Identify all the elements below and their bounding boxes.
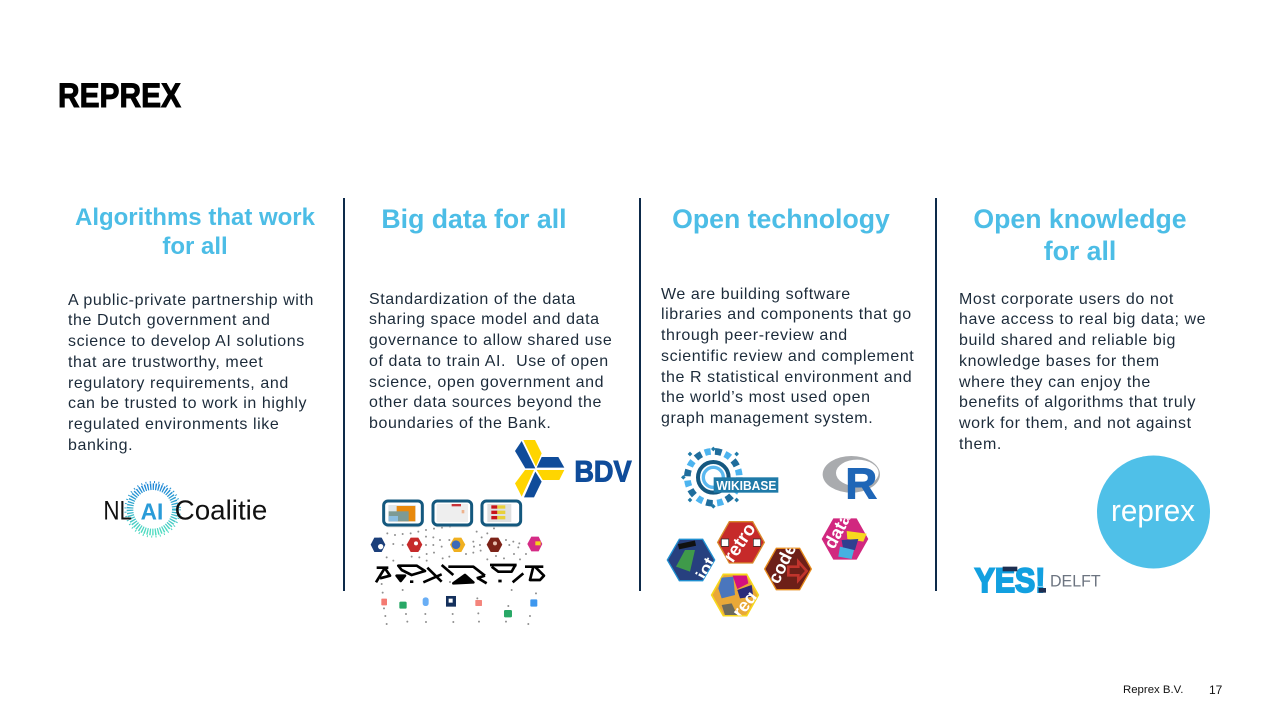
divider 3 <box>935 198 937 591</box>
text: algorithms description: the Dutch government and <box>68 312 270 329</box>
sticker: retro: retro <box>719 519 760 566</box>
logo: NL AI Coalitie: Coalitie <box>175 494 267 525</box>
connector dots <box>380 525 536 624</box>
hex stickers <box>666 518 868 616</box>
text: open technology description: the R statistical environment and <box>661 369 912 386</box>
divider 1 <box>343 198 345 591</box>
text: open knowledge description: them. <box>959 436 1002 453</box>
heading: open knowledge for all: Open knowledge <box>973 204 1187 234</box>
text: algorithms description: that are trustworthy, meet <box>68 354 263 371</box>
footer: company name: Reprex B.V. <box>1123 684 1183 696</box>
text: open knowledge description: work for them, and not against <box>959 415 1192 432</box>
text: open technology description: libraries and components that go <box>661 306 912 323</box>
logo: YES!Delft: YES! <box>975 562 1045 600</box>
text: algorithms description: A public-private partnership with <box>68 292 314 308</box>
logo: NL AI Coalitie: NL <box>103 495 132 525</box>
heading: algorithms that work for all: Algorithms that work <box>75 204 315 231</box>
logo: YES!Delft: DELFT <box>1050 571 1101 590</box>
text: open technology description: graph management system. <box>661 410 873 427</box>
text: algorithms description: regulatory requirements, and <box>68 375 289 392</box>
text: open knowledge description: have access to real big data; we <box>959 311 1206 328</box>
logo: Wikibase: WIKIBASE <box>716 479 776 493</box>
logo: BDV: BDV <box>574 455 632 488</box>
heading: open knowledge for all <box>973 204 1187 266</box>
chart tile 3 <box>482 501 521 527</box>
sticker: data <box>822 518 868 560</box>
divider 2 <box>639 198 641 591</box>
sticker: reg: reg <box>728 587 761 621</box>
text: big data description: governance to allow shared use <box>369 332 612 349</box>
text: open knowledge description <box>959 290 1206 453</box>
text: open knowledge description: benefits of algorithms that truly <box>959 394 1196 411</box>
text: big data description: Standardization of the data <box>369 290 576 308</box>
sticker: iot <box>667 539 720 583</box>
file icons <box>381 596 537 617</box>
text: algorithms description <box>68 292 314 454</box>
footer: page number: 17 <box>1209 683 1222 697</box>
text: big data description: sharing space model and data <box>369 311 600 328</box>
text: algorithms description: science to develop AI solutions <box>68 333 305 350</box>
text: algorithms description: regulated environments like <box>68 416 279 433</box>
text: open technology description: through peer-review and <box>661 327 848 344</box>
text: algorithms description: can be trusted to work in highly <box>68 395 307 412</box>
heading: open technology: Open technology <box>672 204 890 234</box>
logo: reprex circle: reprex <box>1111 493 1195 528</box>
heading: open knowledge for all: for all <box>1044 236 1116 266</box>
hex badges row <box>371 537 542 552</box>
heading: algorithms that work for all: for all <box>162 233 228 260</box>
text: big data description: of data to train AI. Use of open <box>369 353 609 370</box>
heading: big data for all: Big data for all <box>381 204 567 234</box>
text: open technology description <box>661 286 914 427</box>
title: REPREX wordmark: REPREX <box>58 77 181 115</box>
text: open knowledge description: Most corporate users do not <box>959 290 1174 308</box>
text: open knowledge description: where they can enjoy the <box>959 374 1151 391</box>
chart tile 2 <box>433 501 472 527</box>
text: open knowledge description: knowledge bases for them <box>959 353 1160 370</box>
chart tile 1 <box>384 501 423 527</box>
sticker: data: data <box>820 509 855 552</box>
heading: algorithms that work for all <box>75 204 315 260</box>
text: big data description: boundaries of the Bank. <box>369 415 551 432</box>
logo: R: R <box>845 459 877 508</box>
text: algorithms description: banking. <box>68 437 133 454</box>
sticker: code: code <box>764 540 800 587</box>
text: big data description: other data sources beyond the <box>369 394 602 411</box>
sticker: iot: iot <box>692 554 720 583</box>
text: open technology description: We are building software <box>661 286 851 302</box>
sticker: reg <box>712 574 761 621</box>
text: open knowledge description: build shared and reliable big <box>959 332 1176 349</box>
sticker: code <box>764 548 812 590</box>
text: open technology description: the world’s most used open <box>661 389 871 406</box>
logo: NL AI Coalitie: AI <box>141 498 163 524</box>
text: open technology description: scientific review and complement <box>661 348 914 365</box>
text: big data description <box>369 290 612 432</box>
text: big data description: science, open government and <box>369 374 604 391</box>
